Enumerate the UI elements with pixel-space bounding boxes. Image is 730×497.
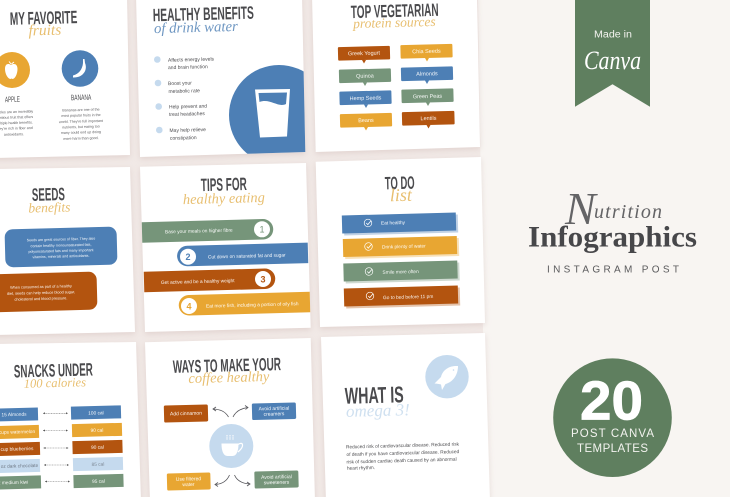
row: blueberries: 90 cal	[91, 445, 104, 451]
heading: to do: TO DO	[385, 174, 415, 194]
script: list: list	[390, 185, 413, 205]
speech tag: almonds	[401, 66, 453, 84]
text: made in: Made in	[594, 30, 632, 40]
row: watermelon	[0, 423, 122, 439]
heading: what is: WHAT IS	[344, 383, 404, 410]
text box: blood sugar: When consumed as part of a healthy	[10, 284, 72, 290]
heading: ways to make your: WAYS TO MAKE YOUR	[173, 355, 282, 378]
arrows	[213, 406, 250, 486]
speech tag: quinoa: Quinoa	[356, 73, 375, 80]
script: 100 calories: 100 calories	[24, 375, 86, 391]
script: nutrition: N	[564, 183, 598, 234]
bullet list: Help prevent and	[169, 104, 207, 111]
to do item: go to bed before 11 pm: Go to bed before 11 pm	[383, 294, 433, 301]
text box: fiber: contain healthy monounsaturated fats,	[30, 243, 91, 248]
ribbon: made in canva	[575, 0, 650, 107]
text: apple description	[0, 109, 33, 137]
text box: fiber: polyunsaturated fats and many important	[28, 248, 94, 254]
text: banana description: more harm than good.	[63, 136, 99, 141]
label: banana: BANANA	[71, 94, 92, 103]
script: healthy eating: healthy eating	[183, 190, 265, 208]
bullet list: Affects energy levels	[168, 57, 215, 64]
box: use filtered water	[167, 472, 211, 491]
text: omega description: risk of sudden cardiac death caused by an abnormal	[346, 457, 457, 466]
panel: ways to make your coffee healthy	[145, 338, 315, 497]
label: apple: APPLE	[5, 96, 20, 105]
speech tag: almonds: Almonds	[416, 71, 438, 78]
tip 3	[144, 268, 275, 292]
tip 1: 1	[259, 224, 265, 234]
box: add cinnamon	[164, 404, 208, 423]
icon: banana	[62, 50, 98, 87]
icon: fish	[425, 355, 469, 398]
template cards group	[0, 0, 490, 497]
tip 1: Base your meals on higher fibre	[165, 228, 233, 235]
row: blueberries	[0, 440, 123, 456]
tip 4: 4	[186, 301, 192, 311]
to do item: drink plenty of water	[343, 236, 459, 259]
text box: blood sugar: diet, seeds can help reduce blood sugar,	[7, 290, 75, 296]
script: of drink water: of drink water	[154, 19, 238, 37]
row: almonds	[0, 405, 121, 422]
text: banana description: world. They're full important	[59, 119, 103, 124]
script: benefits: benefits	[28, 199, 71, 216]
speech tag: lentils	[402, 111, 455, 128]
row: almonds: 15 Almonds	[1, 412, 27, 418]
speech tag: green peas: Green Peas	[413, 94, 442, 100]
tip 4	[179, 292, 310, 316]
row: dark chocolate	[0, 457, 123, 473]
panel: snacks under 100 calories	[0, 342, 141, 497]
speech tag: hemp seeds	[339, 90, 392, 108]
speech tag: chia seeds	[400, 44, 453, 62]
tip 4: Eat more fish, including a portion of oily fish	[206, 301, 299, 310]
background tint behind template cards	[0, 0, 488, 497]
to do item: eat healthy	[342, 213, 458, 235]
to do item: eat healthy: Eat healthy	[381, 220, 406, 227]
speech tag: greek yogurt: Greek Yogurt	[348, 51, 381, 57]
title block	[528, 183, 697, 276]
panel: my favorite fruits	[0, 0, 130, 158]
to do item: smile more often	[343, 261, 460, 283]
script: fruits: fruits	[28, 22, 61, 39]
number: 20: 20	[580, 370, 643, 432]
heading: top vegetarian: TOP VEGETARIAN	[351, 1, 439, 23]
script: coffee healthy: coffee healthy	[188, 369, 270, 387]
text: apple description: antioxidants.	[4, 132, 24, 137]
bullet list: treat headaches	[169, 111, 205, 118]
heading: infographics: Infographics	[528, 221, 697, 254]
tip 2	[177, 243, 308, 267]
panel: tips for healthy eating	[140, 163, 311, 332]
text box: blood sugar: cholesterol and blood pressure.	[14, 296, 68, 302]
script: omega 3: omega 3!	[346, 400, 410, 421]
text: omega description: Reduced risk of cardiovascular disease. Reduced risk	[346, 442, 460, 451]
script: protein sources: protein sources	[352, 14, 436, 31]
icon: glass of water	[229, 65, 306, 154]
row: almonds: 100 cal	[88, 410, 104, 417]
text box: fiber	[5, 227, 117, 267]
text: banana description: most popular fruits in the	[61, 113, 101, 118]
speech tag: beans: Beans	[358, 118, 374, 124]
box: avoid artificial creamers	[252, 402, 296, 420]
box: avoid artificial creamers: creamers	[263, 411, 285, 418]
speech tag: beans	[340, 113, 392, 130]
text box: blood sugar	[0, 272, 97, 312]
to do item: smile more often: Smile more often	[382, 269, 419, 276]
speech tag: chia seeds: Chia Seeds	[412, 49, 441, 55]
tip 2: Cut down on saturated fat and sugar	[208, 253, 286, 261]
to do item: go to bed before 11 pm	[344, 286, 460, 308]
speech tag: quinoa	[339, 68, 391, 86]
row: dark chocolate: 85 cal	[91, 462, 104, 468]
icon: coffee cup	[209, 424, 253, 468]
subtitle: instagram post: INSTAGRAM POST	[547, 265, 679, 276]
tip 1	[142, 219, 273, 243]
box: avoid artificial creamers: Avoid artificial	[259, 406, 289, 412]
bullet list: and brain function	[168, 64, 208, 71]
text: post canva: POST CANVA	[571, 428, 654, 440]
row: kiwi	[0, 474, 124, 490]
tip 2: 2	[185, 252, 191, 262]
box: avoid artificial sweeteners: sweeteners	[264, 480, 290, 486]
box: avoid artificial sweeteners	[254, 470, 299, 489]
box: avoid artificial sweeteners: Avoid artificial	[261, 474, 292, 481]
box: use filtered water: Use filtered	[176, 476, 201, 483]
panel: healthy benefits	[135, 0, 306, 160]
bullet list	[154, 56, 215, 142]
heading: my favorite: MY FAVORITE	[10, 8, 78, 30]
text box: fiber: Seeds are great sources of fiber. They also	[27, 237, 95, 242]
row: watermelon: 90 cal	[90, 428, 103, 434]
bullet list: metabolic rate	[168, 88, 200, 95]
text: banana description	[59, 108, 103, 141]
text: banana description: nutrients, but eating too	[62, 125, 100, 129]
heading: tips for: TIPS FOR	[201, 175, 247, 196]
box: use filtered water: water	[182, 482, 195, 488]
text: omega description: heart rhythm.	[347, 465, 375, 472]
text: banana description: Bananas are one of the	[62, 108, 100, 112]
text: omega description: of death if you have cardiovascular disease. Reduced	[346, 449, 460, 458]
badge: 20 post canva templates	[553, 358, 672, 477]
to do item: drink plenty of water: Drink plenty of water	[382, 243, 426, 251]
heading: healthy benefits: HEALTHY BENEFITS	[153, 4, 254, 26]
speech tag: lentils: Lentils	[420, 116, 437, 122]
box: add cinnamon: Add cinnamon	[170, 411, 202, 417]
speech tag: green peas	[401, 88, 454, 106]
text: omega description	[346, 442, 460, 472]
tip 3: 3	[260, 274, 266, 284]
heading: snacks under: SNACKS UNDER	[14, 361, 93, 382]
panel: seeds benefits	[0, 167, 135, 335]
row: kiwi: 95 cal	[92, 479, 105, 485]
bullet list: May help relieve	[169, 127, 206, 134]
panel: top vegetarian protein sources	[312, 0, 480, 152]
text: templates: TEMPLATES	[577, 443, 648, 455]
bullet list: constipation	[170, 135, 197, 142]
text: banana description: many could end up doing	[61, 130, 101, 135]
heading: seeds: SEEDS	[32, 185, 65, 206]
speech tag: hemp seeds: Hemp Seeds	[350, 95, 382, 102]
tip 3: Get active and be a healthy weight	[161, 278, 235, 286]
panel: what is omega 3	[321, 333, 490, 497]
script: nutrition: utrition	[594, 201, 662, 223]
icon: apple	[0, 52, 30, 88]
speech tag: greek yogurt	[338, 46, 390, 64]
bullet list: Boost your	[168, 80, 192, 87]
text: canva: Canva	[584, 46, 641, 75]
panel: to do list	[316, 157, 485, 327]
text box: fiber: vitamins, minerals and antioxidants.	[32, 254, 89, 259]
